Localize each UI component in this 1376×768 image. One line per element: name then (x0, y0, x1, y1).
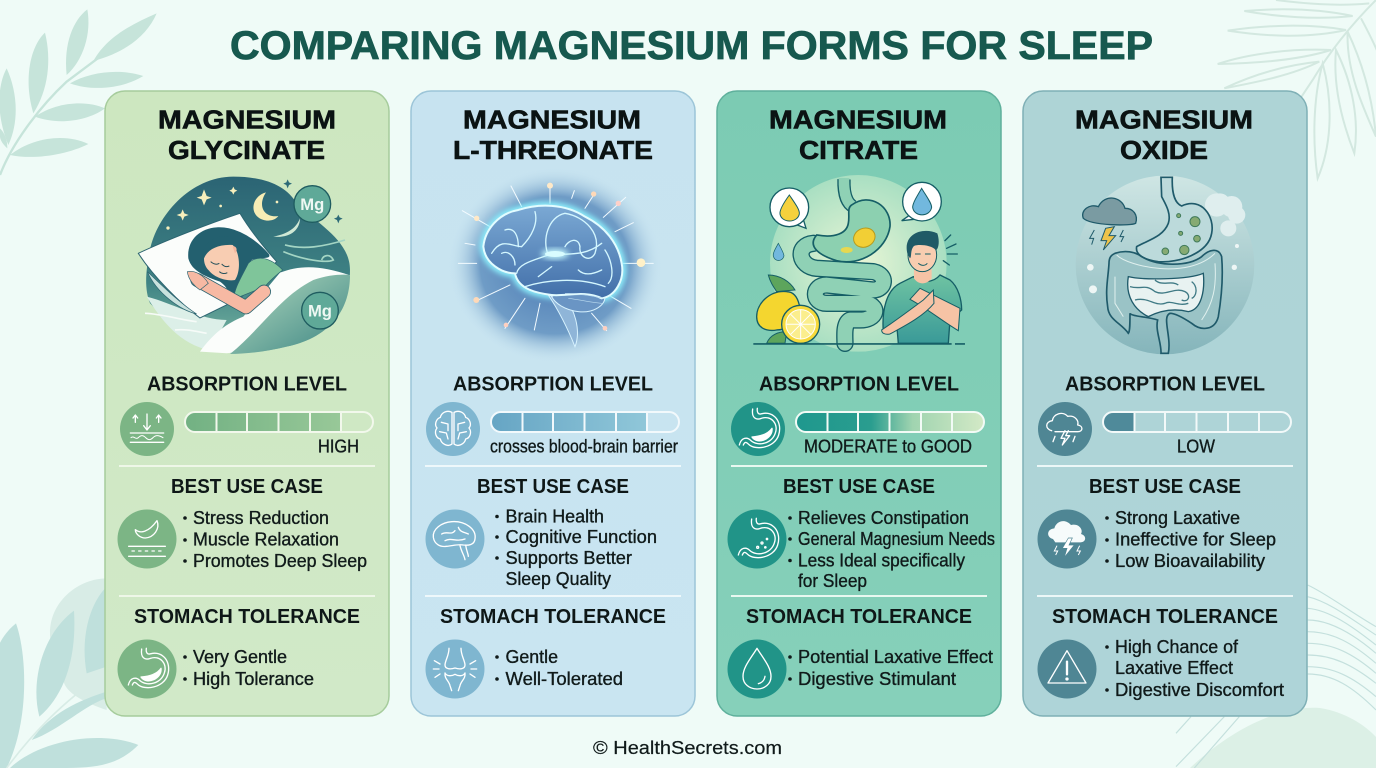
lemons (768, 275, 795, 292)
section: stomach tolerance (426, 606, 666, 698)
section: stomach tolerance (1038, 606, 1284, 700)
icon: absorption arrows (120, 402, 174, 456)
bullet list: Strong Laxative (1115, 508, 1240, 528)
illustration: woman sleeping with Mg spheres (138, 177, 350, 354)
icon: solid storm cloud (1038, 510, 1096, 568)
section: best use case: BEST USE CASE (171, 476, 323, 498)
bullet list: Digestive Discomfort (1115, 680, 1284, 700)
panel: magnesium citrate (717, 91, 1001, 716)
bullet list (1105, 508, 1276, 571)
heading: citrate: MAGNESIUM (769, 104, 947, 134)
section: absorption level: ABSORPTION LEVEL (1065, 374, 1265, 396)
section: absorption level: ABSORPTION LEVEL (759, 374, 959, 396)
decoration: top-right outlined palm leaf (1218, 0, 1376, 178)
heading: glycinate: GLYCINATE (168, 135, 325, 165)
section: best use case (426, 476, 657, 589)
icon: water drop (728, 640, 786, 698)
heading: oxide: MAGNESIUM (1075, 104, 1253, 134)
heading: oxide: OXIDE (1120, 135, 1208, 165)
decoration: bottom-left leaves (0, 578, 138, 768)
panel: magnesium l-threonate (411, 91, 695, 716)
illustration: digestive tract, lemons and man (753, 175, 965, 352)
section: best use case (118, 476, 367, 571)
illustration: glowing brain (448, 167, 662, 363)
heading: l-threonate: MAGNESIUM (463, 104, 641, 134)
bullet list: Well-Tolerated (506, 669, 623, 689)
heading: glycinate: MAGNESIUM (158, 104, 336, 134)
bullet list: Brain Health (506, 506, 604, 526)
level label: LOW (1177, 436, 1215, 456)
bullet list: Supports Better (506, 548, 632, 568)
section: absorption level (731, 374, 984, 456)
section: stomach tolerance: STOMACH TOLERANCE (1052, 606, 1278, 628)
bubbles (797, 219, 806, 228)
icon: joint (426, 640, 484, 698)
bullet list: Less Ideal specifically (798, 550, 965, 570)
section: stomach tolerance (118, 606, 360, 698)
bullet list: Sleep Quality (506, 569, 611, 589)
bullet list (788, 647, 993, 689)
section: stomach tolerance: STOMACH TOLERANCE (746, 606, 972, 628)
panel: magnesium oxide (1023, 91, 1307, 716)
bullet list: Muscle Relaxation (193, 530, 339, 550)
footer credit: © HealthSecrets.com (593, 738, 782, 758)
bullet list: Gentle (506, 647, 558, 667)
decoration: top-left leaf branch (0, 9, 157, 175)
section: best use case: BEST USE CASE (1089, 476, 1241, 498)
bullet list: Low Bioavailability (1115, 551, 1265, 571)
bullet list: Stress Reduction (193, 508, 329, 528)
level label: HIGH (318, 436, 359, 456)
illustration: irritated gut and storm cloud (1076, 176, 1254, 354)
section: best use case: BEST USE CASE (477, 476, 629, 498)
bullet list (183, 508, 367, 571)
Mg sphere bottom: Mg (308, 302, 332, 321)
section: absorption level (120, 374, 373, 456)
section: stomach tolerance: STOMACH TOLERANCE (440, 606, 666, 628)
section: stomach tolerance (728, 606, 993, 698)
hair back (188, 227, 269, 298)
bullet list: for Sleep (798, 571, 867, 591)
arm (197, 280, 264, 307)
bullet list (183, 647, 314, 689)
level label: MODERATE to GOOD (804, 436, 972, 456)
bullet list: Potential Laxative Effect (798, 647, 993, 667)
level bar: low (1103, 412, 1291, 432)
bullet list: High Chance of (1115, 637, 1239, 657)
icon: stomach (731, 402, 785, 456)
heading: l-threonate: L-THREONATE (453, 135, 653, 165)
heading: glycinate (158, 104, 336, 165)
icon: warning triangle (1038, 640, 1096, 698)
section: absorption level: ABSORPTION LEVEL (147, 374, 347, 396)
section: stomach tolerance: STOMACH TOLERANCE (134, 606, 360, 628)
level bar: blood-brain (491, 412, 679, 432)
bullet list: Very Gentle (193, 647, 287, 667)
bullet list: General Magnesium Needs (798, 529, 995, 549)
level label: crosses blood-brain barrier (490, 436, 678, 456)
level bar: moderate to good (796, 412, 984, 432)
title: COMPARING MAGNESIUM FORMS FOR SLEEP (230, 24, 1153, 68)
icon: brain side view (426, 510, 484, 568)
section: best use case: BEST USE CASE (783, 476, 935, 498)
level bar: high (185, 412, 373, 432)
heading: citrate: CITRATE (799, 135, 918, 165)
section: absorption level (426, 374, 679, 456)
bullet list: Ineffective for Sleep (1115, 530, 1276, 550)
bullet list (1105, 637, 1284, 700)
icon: muscle layers (118, 510, 176, 568)
section: absorption level (1038, 374, 1291, 456)
Mg sphere top (294, 186, 331, 222)
heading: oxide (1075, 104, 1253, 165)
section: best use case (1038, 476, 1276, 571)
tract (801, 178, 883, 343)
bullet list: Digestive Stimulant (798, 669, 956, 689)
icon: brain top view (426, 402, 480, 456)
bullet list (495, 647, 623, 689)
heading: l-threonate (453, 104, 653, 165)
heading: citrate (769, 104, 947, 165)
blanket (200, 267, 350, 353)
bullet list: High Tolerance (193, 669, 314, 689)
icon: storm cloud outline (1038, 402, 1092, 456)
bullet list (495, 506, 657, 589)
Mg sphere top: Mg (300, 195, 324, 214)
panel: magnesium glycinate (105, 91, 389, 716)
shirt (233, 258, 283, 299)
section: best use case (728, 476, 995, 591)
bullet list: Relieves Constipation (798, 508, 969, 528)
man (883, 275, 962, 343)
bullet list (788, 508, 995, 591)
Mg sphere bottom (302, 292, 338, 329)
face (204, 245, 239, 280)
section: absorption level: ABSORPTION LEVEL (453, 374, 653, 396)
bullet list: Cognitive Function (506, 527, 657, 547)
bullet list: Laxative Effect (1115, 658, 1233, 678)
bullet list: Promotes Deep Sleep (193, 551, 367, 571)
icon: stomach with bubbles (728, 510, 786, 568)
decoration: bottom-right hill and lines (1176, 585, 1376, 768)
icon: stomach (118, 640, 176, 698)
